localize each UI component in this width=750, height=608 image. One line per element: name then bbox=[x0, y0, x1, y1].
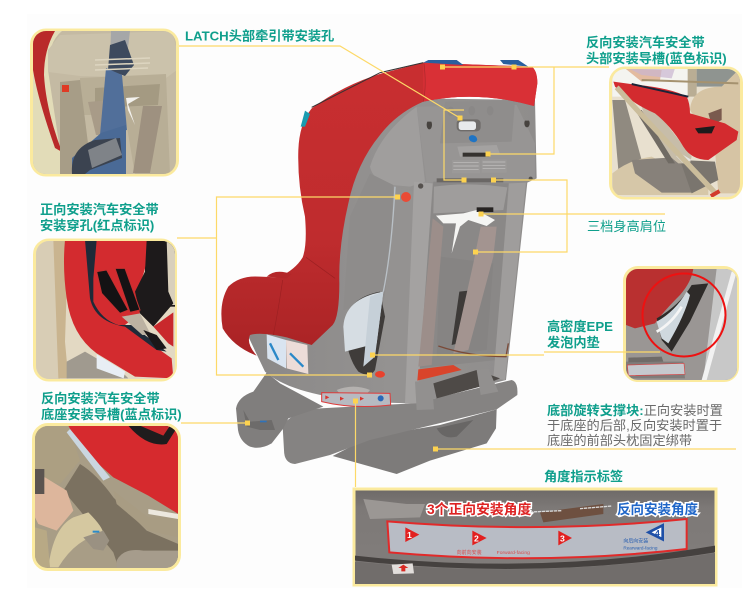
panel: LATCH photo bbox=[30, 28, 180, 178]
text block: rotating support: 正向安装时置 bbox=[644, 403, 723, 418]
heading: LATCH: LATCH头部牵引带安装孔 bbox=[185, 28, 334, 44]
heading: angle label: 角度指示标签 bbox=[544, 468, 623, 484]
angle scale label: 向后向安装 bbox=[623, 538, 648, 545]
seat rotate lever bbox=[337, 387, 370, 394]
panel: angle indicator close-up bbox=[354, 489, 716, 585]
angle scale label: 2 bbox=[474, 533, 479, 543]
heading: forward belt holes: 安装穿孔(红点标识) bbox=[40, 217, 154, 233]
heading: forward belt holes: 正向安装汽车安全带 bbox=[40, 201, 159, 217]
panel: rear-facing install photo bbox=[608, 67, 742, 200]
angle scale label: 4 bbox=[655, 528, 660, 538]
rear foot bbox=[236, 373, 323, 448]
foam opening bbox=[345, 292, 385, 375]
rotating base bbox=[283, 380, 517, 464]
leader lines bbox=[177, 46, 736, 487]
text block: rotating support: 于底座的后部,反向安装时置于 bbox=[547, 418, 722, 433]
heading: rear-facing belt head slot: 头部安装导槽(蓝色标识) bbox=[586, 50, 727, 66]
forward angles callout: 3个正向安装角度 bbox=[427, 501, 531, 517]
angle label strip bbox=[322, 393, 391, 407]
red shell cushion bbox=[221, 63, 537, 356]
angle scale label: 1 bbox=[407, 530, 412, 540]
angle scale label: Rearward-facing bbox=[623, 545, 658, 550]
base support block bbox=[333, 409, 497, 474]
head strap hole bbox=[457, 119, 481, 131]
blue marker bbox=[468, 134, 478, 144]
panel: rear base guide photo bbox=[33, 424, 180, 571]
screw holes bbox=[427, 121, 530, 129]
angle scale label: Forward-facing bbox=[497, 550, 530, 556]
inner channel bbox=[418, 182, 508, 368]
angle scale label bbox=[387, 519, 687, 558]
red highlight circle bbox=[642, 274, 726, 356]
left channel bbox=[383, 187, 413, 403]
shell body bbox=[248, 98, 537, 403]
red harness plate bbox=[417, 365, 462, 381]
panel: foam close-up photo bbox=[623, 265, 740, 382]
heading: three shoulder heights: 三档身高肩位 bbox=[587, 218, 666, 234]
angle scale label: 3 bbox=[560, 533, 565, 543]
rearward angle callout: 反向安装角度 bbox=[617, 501, 698, 517]
angle scale label: 向前向安装 bbox=[457, 549, 482, 556]
buckle vents bbox=[437, 145, 507, 182]
panel: forward install photo bbox=[33, 238, 177, 382]
car seat rear view illustration bbox=[221, 60, 537, 474]
heading: EPE foam: 发泡内垫 bbox=[547, 334, 600, 350]
heading: EPE foam: 高密度EPE bbox=[547, 318, 613, 334]
instruction sticker bbox=[267, 334, 308, 374]
text block: rotating support: 底部旋转支撑块: bbox=[547, 402, 644, 418]
heading: rear-facing belt head slot: 反向安装汽车安全带 bbox=[586, 34, 705, 50]
heading: rear-facing base slot: 反向安装汽车安全带 bbox=[41, 390, 160, 406]
harness straps bbox=[418, 218, 443, 367]
heading: rear-facing base slot: 底座安装导槽(蓝点标识) bbox=[41, 406, 182, 422]
side column bbox=[405, 182, 433, 403]
red dots bbox=[401, 192, 411, 202]
text block: rotating support: 底座的前部头枕固定绑带 bbox=[547, 432, 692, 448]
white tie bbox=[436, 210, 495, 253]
